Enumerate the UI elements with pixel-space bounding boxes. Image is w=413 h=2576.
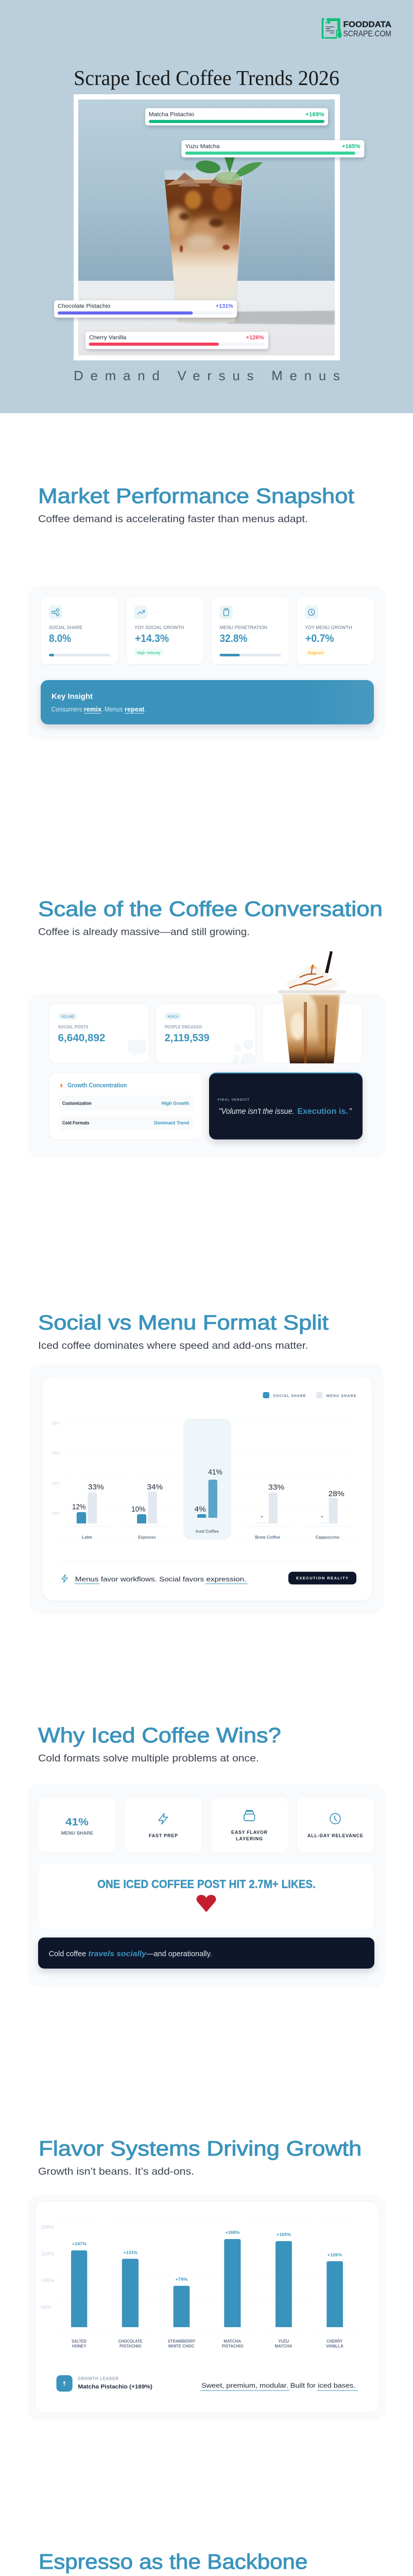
metric card: yoy menu growth: Stagnant bbox=[307, 650, 324, 655]
callout: key insight: Consumers bbox=[51, 706, 82, 713]
bar chart: flavor growth: 50% bbox=[41, 2305, 51, 2311]
bars: brew coffee: 33% bbox=[268, 1483, 284, 1492]
bar: yuzu matcha bbox=[275, 2232, 292, 2349]
bar chart: flavor growth bbox=[41, 2223, 357, 2349]
card: growth concentration bbox=[49, 1073, 202, 1140]
card: growth concentration: Dominant Trend bbox=[154, 1120, 189, 1126]
bars: latte: Latte bbox=[82, 1535, 92, 1539]
card: final verdict: "Volume isn't the issue. bbox=[218, 1107, 295, 1116]
bars: espresso: Espresso bbox=[138, 1535, 156, 1539]
callout: key insight: Menus bbox=[105, 706, 123, 713]
bar chart: social vs menu: 10% bbox=[51, 1512, 60, 1516]
stat card: social posts: 6,640,892 bbox=[58, 1032, 105, 1044]
card: Cherry Vanilla bbox=[85, 332, 268, 349]
card: final verdict: " bbox=[349, 1107, 352, 1116]
heading: scale of conversation: Scale of the Coffee Conversation bbox=[38, 897, 383, 921]
bar chart: social vs menu: 30% bbox=[51, 1451, 60, 1455]
bar: yuzu matcha: YUZU bbox=[278, 2339, 289, 2344]
metric card: menu penetration bbox=[212, 598, 289, 664]
chart legend: MENU SHARE bbox=[326, 1394, 356, 1398]
callout: key insight: . bbox=[145, 706, 146, 713]
bar: yuzu matcha: MATCHA bbox=[275, 2344, 292, 2349]
bar: strawberry white choc bbox=[168, 2277, 196, 2349]
stat card: people engaged: 2,119,539 bbox=[165, 1032, 210, 1044]
heading: flavor systems: Flavor Systems Driving Growth bbox=[39, 2137, 362, 2160]
bar: salted honey: HONEY bbox=[72, 2344, 87, 2349]
banner: cold coffee travels: —and operationally. bbox=[146, 1950, 212, 1958]
bar: cherry vanilla: CHERRY bbox=[326, 2339, 343, 2344]
card: Yuzu Matcha bbox=[181, 140, 364, 158]
card: Chocolate Pistachio bbox=[54, 300, 237, 317]
bar: strawberry white choc: WHITE CHOC bbox=[168, 2344, 195, 2349]
card: final verdict bbox=[209, 1073, 363, 1140]
bars: iced coffee: Iced Coffee bbox=[196, 1529, 219, 1534]
whipped cream bbox=[286, 963, 338, 991]
callout: key insight: remix bbox=[84, 706, 101, 713]
icon: heart bbox=[197, 1895, 216, 1912]
growth leader callout: Matcha Pistachio (+169%) bbox=[78, 2384, 152, 2390]
logo: FoodDataScrape top: SCRAPE.COM bbox=[343, 29, 391, 38]
card: Matcha Pistachio bbox=[145, 108, 328, 126]
panel: market metrics bbox=[28, 586, 385, 740]
metric card: social share: 8.0% bbox=[49, 633, 71, 645]
bars: iced coffee bbox=[195, 1468, 222, 1534]
bars: espresso: 10% bbox=[131, 1505, 145, 1514]
card: 41% menu share bbox=[39, 1797, 116, 1852]
card: likes highlight bbox=[39, 1863, 374, 1929]
card: growth concentration: Cold Formats bbox=[62, 1120, 89, 1126]
banner: cold coffee travels bbox=[38, 1938, 374, 1969]
heading: format split: Social vs Menu Format Split bbox=[38, 1312, 329, 1334]
bar: salted honey bbox=[71, 2241, 87, 2349]
bars: iced coffee: 4% bbox=[195, 1505, 206, 1514]
bar chart: social vs menu bbox=[51, 1419, 356, 1560]
metric card: menu penetration: MENU PENETRATION bbox=[220, 625, 267, 630]
heading: market performance: Market Performance Snapshot bbox=[38, 484, 355, 508]
photo frame with iced coffee: +169% bbox=[305, 111, 324, 117]
bars: brew coffee: - bbox=[261, 1512, 263, 1521]
note text: Sweet, premium, modular. Built for iced bases. bbox=[201, 2382, 355, 2389]
callout: key insight: repeat bbox=[125, 706, 145, 713]
photo frame with iced coffee bbox=[54, 94, 364, 361]
bar: matcha pistachio bbox=[222, 2230, 244, 2349]
metric card: yoy social growth: YOY SOCIAL GROWTH bbox=[134, 625, 184, 630]
icon: whipped iced coffee cup bbox=[278, 951, 346, 1063]
bar chart: social vs menu: 20% bbox=[51, 1482, 60, 1486]
bar: cherry vanilla bbox=[326, 2252, 343, 2349]
logo: FoodDataScrape top bbox=[322, 18, 391, 39]
banner: cold coffee travels: travels socially bbox=[88, 1950, 147, 1958]
stat card: social posts: VOLUME bbox=[61, 1015, 75, 1019]
stat card: people engaged: REACH bbox=[168, 1015, 178, 1019]
card: all-day relevance: ALL-DAY RELEVANCE bbox=[307, 1833, 363, 1838]
subheading: Growth isn’t beans. It’s add-ons. bbox=[38, 2166, 194, 2177]
bar: cherry vanilla: VANILLA bbox=[326, 2344, 343, 2349]
bars: espresso bbox=[131, 1483, 163, 1539]
photo frame with iced coffee: Chocolate Pistachio bbox=[58, 303, 110, 310]
bars: cappuccino: Cappuccino bbox=[316, 1535, 339, 1539]
panel: why iced wins bbox=[28, 1784, 385, 1987]
card: all-day relevance bbox=[297, 1797, 374, 1852]
icon: bolt bbox=[62, 1574, 67, 1583]
bars: cappuccino: - bbox=[321, 1512, 323, 1521]
panel: conversation scale bbox=[48, 951, 369, 1149]
callout: key insight: Key Insight bbox=[51, 692, 93, 701]
card: 41% menu share: 41% bbox=[65, 1817, 89, 1828]
callout: key insight bbox=[41, 680, 374, 724]
card: easy flavor layering: EASY FLAVOR bbox=[231, 1830, 268, 1835]
bar: matcha pistachio: PISTACHIO bbox=[222, 2344, 244, 2349]
subheading: Coffee demand is accelerating faster than menus adapt. bbox=[38, 513, 308, 524]
card: growth concentration: Customization bbox=[62, 1100, 92, 1107]
bar: yuzu matcha: +165% bbox=[277, 2232, 291, 2237]
bar: chocolate pistachio: +131% bbox=[124, 2250, 137, 2255]
banner: cold coffee travels: Cold coffee bbox=[49, 1950, 86, 1958]
card: growth concentration: High Growth bbox=[162, 1100, 189, 1107]
bar: strawberry white choc: +79% bbox=[175, 2277, 188, 2282]
bar: chocolate pistachio: PISTACHIO bbox=[119, 2344, 141, 2349]
card: fast prep: FAST PREP bbox=[149, 1833, 178, 1838]
icon: mint leaves bbox=[195, 157, 263, 184]
bar: salted honey: SALTED bbox=[72, 2339, 87, 2344]
note text: Menus favor workflows. Social favors expression. bbox=[75, 1575, 246, 1583]
hero section bbox=[0, 0, 413, 413]
metric card: yoy menu growth: +0.7% bbox=[305, 633, 334, 645]
title: Scrape Iced Coffee Trends 2026 bbox=[74, 66, 339, 90]
bars: brew coffee: Brew Coffee bbox=[255, 1535, 281, 1539]
photo frame with iced coffee: Matcha Pistachio bbox=[149, 111, 194, 117]
bars: iced coffee: 41% bbox=[208, 1468, 222, 1477]
growth leader callout bbox=[57, 2375, 152, 2392]
logo: FoodDataScrape top: FOODDATA bbox=[343, 20, 391, 29]
callout: key insight: . bbox=[102, 706, 104, 713]
metric card: yoy menu growth: YOY MENU GROWTH bbox=[305, 625, 352, 630]
photo frame with iced coffee: Yuzu Matcha bbox=[185, 143, 220, 149]
card: 41% menu share: MENU SHARE bbox=[61, 1831, 93, 1836]
stat card: people engaged bbox=[156, 1004, 256, 1064]
bar chart: flavor growth: 200% bbox=[41, 2225, 54, 2230]
card: final verdict: FINAL VERDICT bbox=[217, 1098, 249, 1101]
bar chart: flavor growth: 100% bbox=[41, 2278, 54, 2284]
bars: brew coffee bbox=[255, 1483, 284, 1539]
bar: salted honey: +147% bbox=[72, 2241, 87, 2246]
photo frame with iced coffee: Cherry Vanilla bbox=[89, 334, 127, 341]
subheading: Cold formats solve multiple problems at once. bbox=[38, 1753, 259, 1764]
stat card: people engaged: PEOPLE ENGAGED bbox=[165, 1024, 202, 1029]
button: execution reality: EXECUTION REALITY bbox=[296, 1576, 348, 1581]
metric card: social share bbox=[41, 598, 118, 664]
bar: chocolate pistachio bbox=[118, 2250, 143, 2349]
chart legend: SOCIAL SHARE bbox=[273, 1394, 306, 1398]
bars: latte: 33% bbox=[88, 1483, 104, 1492]
panel: flavor growth bbox=[28, 2195, 385, 2420]
bar: matcha pistachio: MATCHA bbox=[223, 2339, 242, 2344]
metric card: yoy social growth: High Velocity bbox=[137, 650, 161, 655]
subheading: Iced coffee dominates where speed and add-ons matter. bbox=[38, 1340, 308, 1351]
card: fast prep bbox=[125, 1797, 202, 1852]
metric card: yoy social growth: +14.3% bbox=[135, 633, 169, 645]
button: execution reality bbox=[288, 1572, 356, 1584]
stat card: social posts: SOCIAL POSTS bbox=[58, 1024, 89, 1029]
bar: matcha pistachio: +169% bbox=[225, 2230, 240, 2235]
subheading: Coffee is already massive—and still growing. bbox=[38, 926, 250, 938]
bar chart: social vs menu: 40% bbox=[51, 1421, 60, 1426]
bars: cappuccino bbox=[316, 1489, 345, 1539]
metric card: social share: SOCIAL SHARE bbox=[49, 625, 82, 630]
bar chart: flavor growth: 150% bbox=[41, 2251, 54, 2257]
card: likes highlight: ONE ICED COFFEE POST HIT 2.7M+ LIKES. bbox=[97, 1878, 316, 1891]
bar: strawberry white choc: STRAWBERRY bbox=[168, 2339, 196, 2344]
card: growth concentration: Growth Concentration bbox=[67, 1083, 127, 1089]
bars: latte: 12% bbox=[72, 1502, 85, 1512]
heading: espresso backbone: Espresso as the Backbone bbox=[39, 2550, 307, 2573]
bar: chocolate pistachio: CHOCOLATE bbox=[118, 2339, 143, 2344]
heading: why iced coffee wins: Why Iced Coffee Wins? bbox=[38, 1723, 281, 1747]
stat card: social posts bbox=[49, 1004, 149, 1064]
bars: latte bbox=[72, 1483, 104, 1539]
subtitle: Demand Versus Menus bbox=[74, 368, 340, 383]
panel: format split bbox=[29, 1364, 384, 1614]
metric card: yoy menu growth bbox=[297, 598, 374, 664]
bar: cherry vanilla: +126% bbox=[328, 2252, 342, 2258]
chart legend bbox=[263, 1392, 356, 1398]
card: easy flavor layering: LAYERING bbox=[236, 1836, 263, 1841]
card: final verdict: Execution is. bbox=[298, 1107, 348, 1116]
metric card: yoy social growth bbox=[127, 598, 203, 664]
icon: iced coffee glass bbox=[162, 157, 263, 324]
stat card: blank with cup bbox=[263, 1004, 363, 1064]
metric card: menu penetration: 32.8% bbox=[220, 633, 248, 645]
photo frame with iced coffee: +126% bbox=[246, 334, 264, 341]
photo frame with iced coffee: +165% bbox=[342, 143, 360, 149]
growth leader callout: GROWTH LEADER bbox=[78, 2376, 118, 2381]
photo frame with iced coffee: +131% bbox=[216, 303, 233, 310]
bars: espresso: 34% bbox=[147, 1483, 163, 1492]
card: easy flavor layering bbox=[211, 1797, 288, 1852]
bars: cappuccino: 28% bbox=[329, 1489, 345, 1498]
